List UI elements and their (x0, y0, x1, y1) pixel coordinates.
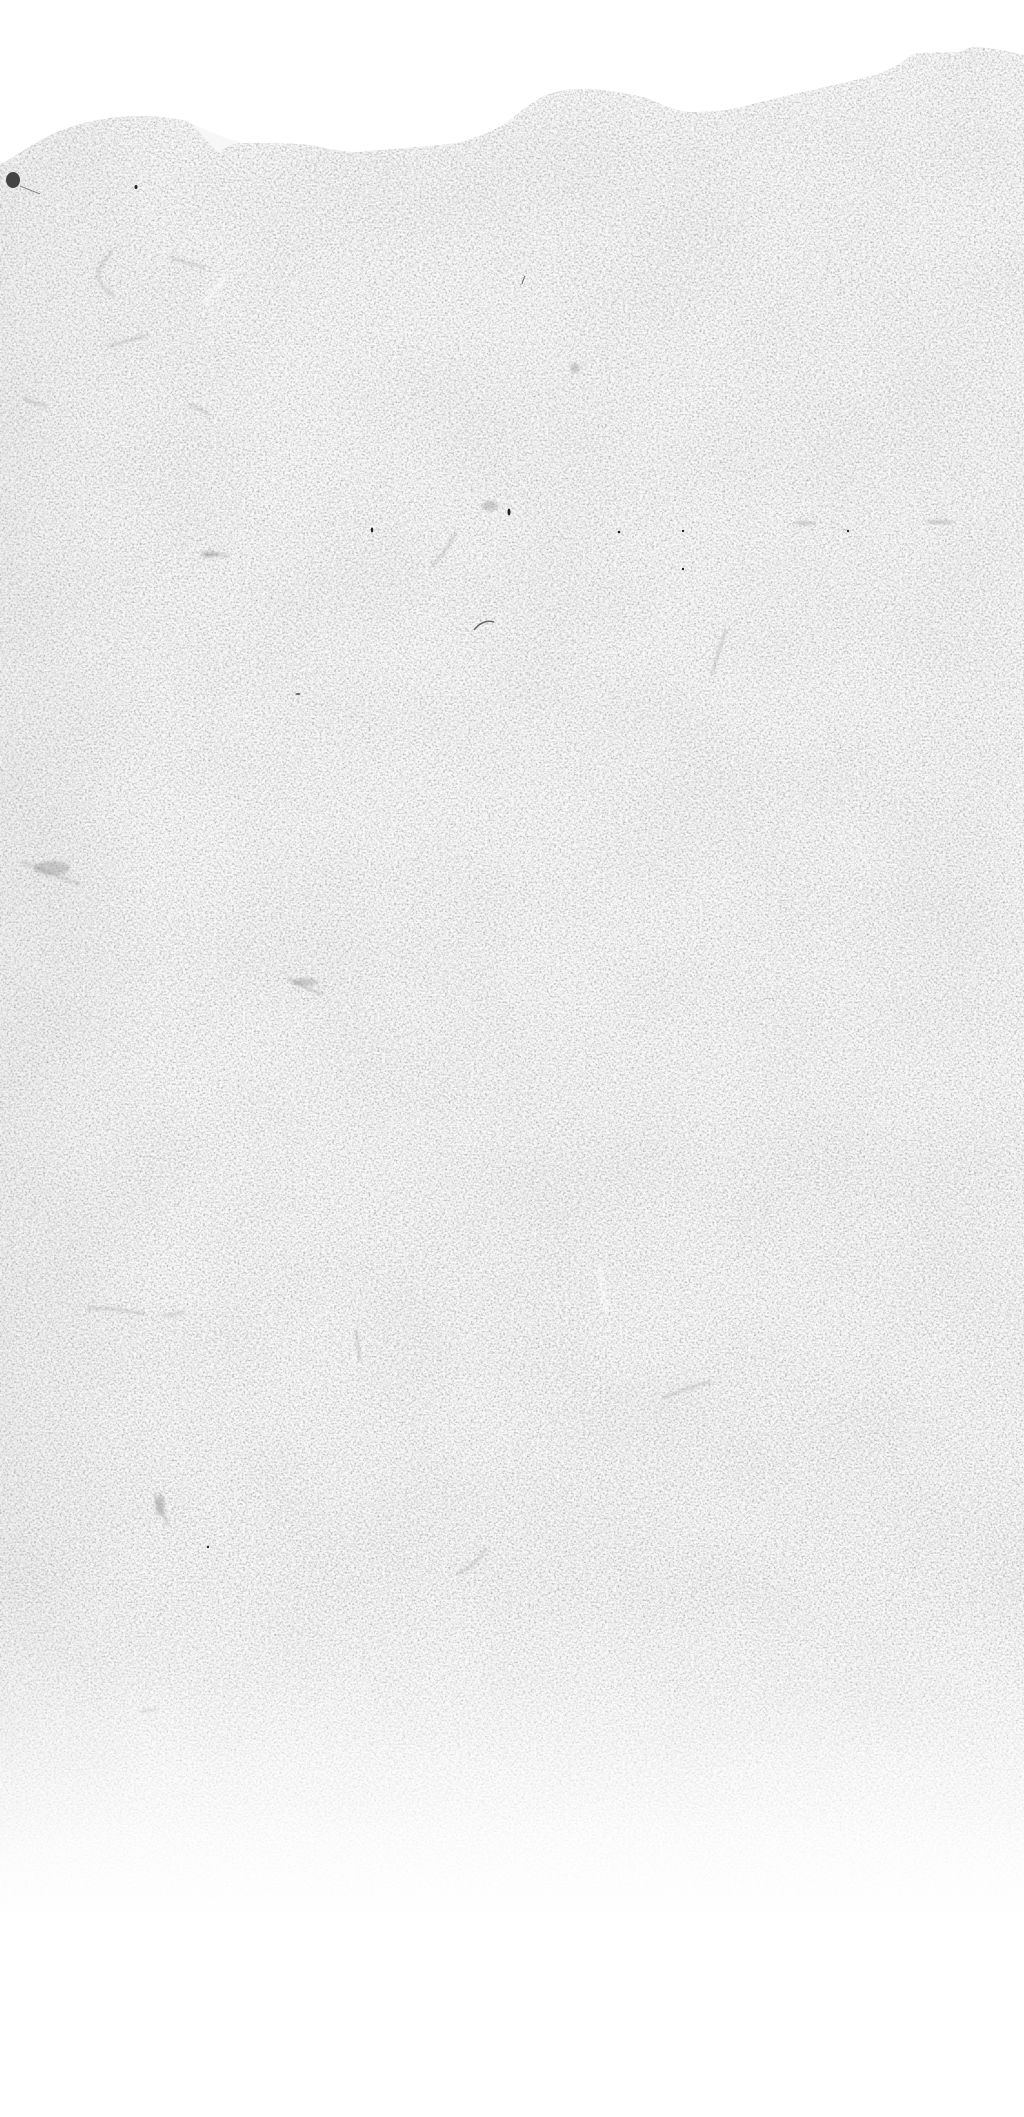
grey blots (34, 363, 954, 1516)
bottom white fade (0, 1633, 1024, 2000)
soft fibres (22, 252, 726, 1712)
dark specks (6, 172, 849, 1548)
light fibres (206, 278, 606, 1310)
pale torn flap (189, 122, 242, 153)
